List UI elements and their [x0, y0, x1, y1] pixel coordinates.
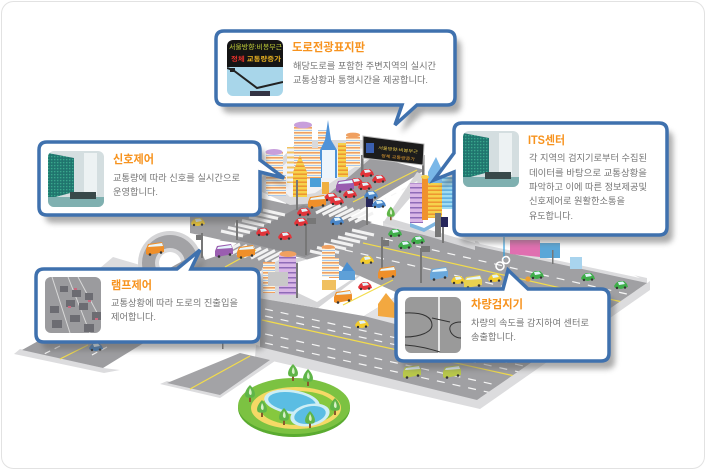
- callout: vehicle detector: [396, 270, 615, 369]
- road 2 stub: [167, 353, 270, 395]
- callout: road sign: [216, 31, 461, 133]
- description: 각 지역의 검지기로부터 수집된: [529, 152, 647, 163]
- description: 신호제어로 원활한소통을: [529, 195, 625, 206]
- road sign board: [361, 136, 424, 175]
- crosswalks: [221, 204, 374, 262]
- description: 교통상황에 따라 도로의 진출입을: [111, 297, 238, 308]
- heading: 램프제어: [111, 278, 152, 292]
- detector marker: [496, 237, 531, 282]
- road sign board: 서울방향:비봉부근: [378, 144, 419, 154]
- its building: [387, 157, 454, 237]
- photo: sign board: [227, 40, 283, 96]
- vehicles: [89, 169, 628, 379]
- lane markings: [262, 238, 627, 392]
- north block: [262, 140, 392, 205]
- description: [471, 317, 589, 342]
- description: [111, 297, 238, 322]
- description: 교통상황과 통행시간을 제공합니다.: [293, 74, 428, 85]
- sidewalk strips: [14, 221, 650, 409]
- heading: 신호제어: [113, 152, 154, 166]
- intersection: [236, 205, 372, 257]
- description: [113, 172, 240, 197]
- callout: ITS center: [434, 123, 673, 243]
- its block: [383, 172, 475, 250]
- description: 데이터를 바탕으로 교통상황을: [529, 168, 647, 178]
- description: [529, 152, 647, 221]
- photo: sign board: 서울방향:비봉부근: [229, 42, 282, 51]
- right top block: [475, 238, 640, 278]
- ramp loop: [138, 231, 202, 295]
- road 1: [22, 156, 425, 368]
- description: 유도합니다.: [529, 211, 573, 221]
- main road mass: [190, 182, 647, 400]
- description: [293, 61, 436, 85]
- description: 제어합니다.: [111, 312, 156, 322]
- photo: loop detector: [405, 297, 461, 353]
- description: 송출합니다.: [471, 332, 516, 342]
- road network: [14, 140, 650, 409]
- callout: ramp control: [36, 250, 265, 350]
- description: 운영합니다.: [113, 187, 158, 197]
- callout: signal control: [39, 142, 290, 223]
- heading: 차량검지기: [471, 297, 523, 311]
- description: 해당도로를 포함한 주변지역의 실시간: [293, 61, 436, 71]
- photo: sign board: 정체 교통량증가: [231, 54, 281, 63]
- park: [238, 364, 350, 437]
- road sign board: 정체 교통량증가: [381, 152, 416, 162]
- photo: control room: [48, 151, 104, 207]
- city towers north block: [266, 120, 360, 197]
- heading: ITS센터: [528, 134, 565, 147]
- description: 차량의 속도를 감지하여 센터로: [471, 317, 589, 328]
- photo: traffic jam: [45, 277, 101, 333]
- photo: ITS room: [463, 131, 519, 187]
- lower buildings: [263, 240, 582, 318]
- white corner blocks: [195, 237, 237, 260]
- heading: 도로전광표지판: [292, 41, 365, 54]
- description: 교통량에 따라 신호를 실시간으로: [113, 172, 240, 183]
- traffic signal poles: [196, 180, 554, 349]
- description: 파악하고 이에 따른 정보제공및: [529, 181, 647, 192]
